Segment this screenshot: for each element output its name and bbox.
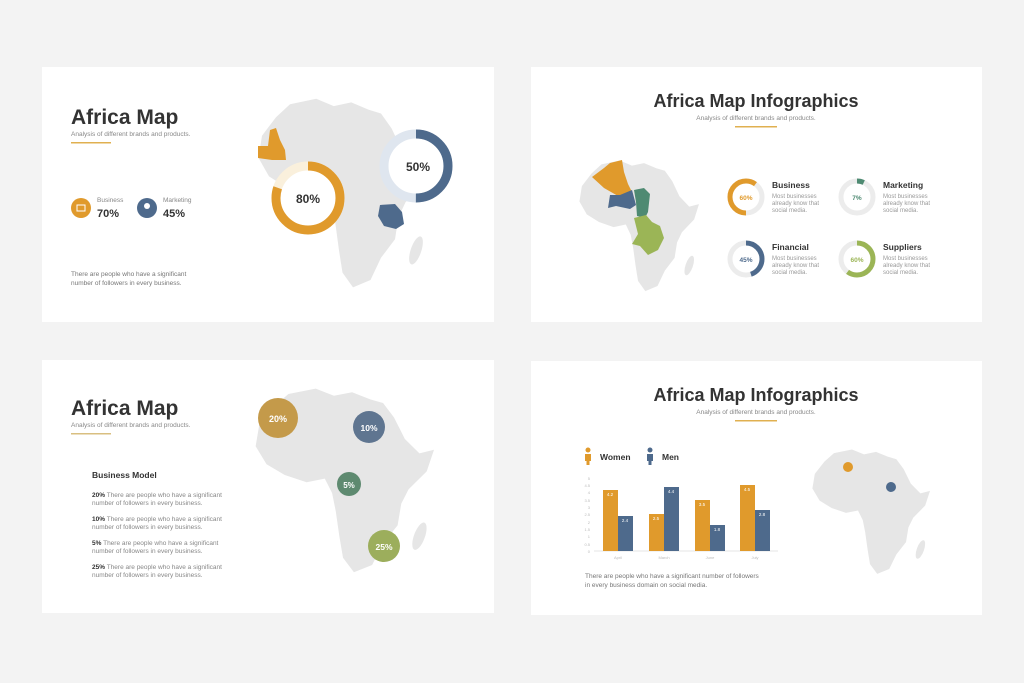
item: financial: social media. (772, 270, 807, 276)
list: number of followers in every business. (92, 524, 203, 531)
donut 80% (276, 166, 340, 230)
donut 80%: 80% (296, 192, 320, 206)
item: financial: Financial (772, 242, 809, 252)
bubble 25% (368, 530, 400, 562)
bar chart: 5 (588, 476, 591, 481)
map: africa bottom-left (256, 389, 434, 572)
bar chart: 4.5 (744, 487, 751, 492)
item: marketing (841, 180, 930, 214)
subtitle: Analysis of different brands and products. (71, 131, 191, 138)
donut 50%: 50% (406, 160, 430, 174)
title: Africa Map (71, 397, 178, 420)
panel: bottom-right chart: in every business domain on social media. (585, 582, 707, 589)
heading: business model: Business Model (92, 470, 157, 480)
bar chart: 4.2 (607, 492, 614, 497)
bar chart: 1.8 (714, 527, 721, 532)
panel: bottom-right chart (531, 361, 982, 615)
bar chart: 0 (588, 549, 591, 554)
list: 20% There are people who have a significant (92, 492, 222, 499)
country: niger (608, 190, 636, 209)
panel: top-right Africa Map Infographics (531, 67, 982, 322)
bubble 20% (258, 398, 298, 438)
country: tanzania (378, 204, 404, 229)
bar chart: 3 (588, 505, 591, 510)
stat: marketing: Marketing (163, 197, 192, 204)
item: marketing: already know that (883, 201, 930, 207)
item: financial (730, 242, 819, 276)
bar chart: 2.5 (653, 516, 660, 521)
item: marketing: Most businesses (883, 194, 928, 200)
item: marketing: Marketing (883, 180, 923, 190)
bubble 5% (337, 472, 361, 496)
item: financial: 45% (739, 257, 753, 264)
stat: marketing (137, 197, 192, 220)
subtitle: Analysis of different brands and products. (696, 115, 816, 122)
country: algeria (592, 160, 632, 196)
stat: marketing: 45% (163, 208, 185, 220)
country: mauritania (258, 128, 286, 160)
country: congo region (632, 215, 664, 255)
bar chart: 4.5 (584, 483, 591, 488)
bubble 10% (353, 411, 385, 443)
footer text: There are people who have a significant number of followers (585, 573, 760, 580)
map: africa bottom-right (812, 449, 930, 574)
item: marketing: social media. (883, 208, 918, 214)
legend (585, 448, 679, 465)
item: marketing: 7% (852, 195, 862, 202)
bar chart: 2.5 (584, 512, 591, 517)
bar chart: 3.5 (699, 502, 706, 507)
list: number of followers in every business. (92, 548, 203, 555)
bar chart (584, 476, 778, 560)
bubble 5%: 5% (343, 481, 355, 490)
item: suppliers: Most businesses (883, 256, 928, 262)
panel: top-left Africa Map: number of followers in every business. (71, 280, 182, 287)
bubble 25%: 25% (375, 542, 393, 552)
bar chart: 1.5 (584, 527, 591, 532)
subtitle: Analysis of different brands and products. (71, 422, 191, 429)
footer text: There are people who have a significant (71, 271, 186, 278)
bar chart: 2.4 (622, 518, 629, 523)
item: suppliers: Suppliers (883, 242, 922, 252)
bar chart: 3.5 (584, 498, 591, 503)
bar chart: 4 (588, 490, 591, 495)
list: number of followers in every business. (92, 572, 203, 579)
item: business: 60% (739, 195, 753, 202)
bar chart: July (751, 555, 759, 560)
title: Africa Map Infographics (653, 385, 859, 405)
marker orange (843, 462, 853, 472)
bubble 10%: 10% (360, 423, 378, 433)
item: suppliers: already know that (883, 263, 930, 269)
stat: business (71, 197, 124, 220)
panel: bottom-left Africa Map business model (42, 360, 494, 613)
item: suppliers: social media. (883, 270, 918, 276)
subtitle: Analysis of different brands and products. (696, 409, 816, 416)
stat: business: 70% (97, 208, 119, 220)
list: 10% There are people who have a significant (92, 516, 222, 523)
item: financial: already know that (772, 263, 819, 269)
item: suppliers (841, 242, 930, 276)
bar chart: 2 (588, 520, 591, 525)
item: financial: Most businesses (772, 256, 817, 262)
panel: top-left Africa Map (42, 67, 494, 322)
stat: business: Business (97, 197, 124, 204)
item: business: Most businesses (772, 194, 817, 200)
bar chart: 2.8 (759, 512, 766, 517)
legend: Women (600, 452, 631, 462)
list: number of followers in every business. (92, 500, 203, 507)
bubble 20%: 20% (269, 414, 287, 424)
bar chart: June (706, 555, 715, 560)
item: suppliers: 60% (850, 257, 864, 264)
bar chart: April (614, 555, 622, 560)
bar chart: March (658, 555, 670, 560)
legend: Men (662, 452, 679, 462)
bar chart: 0.5 (584, 542, 591, 547)
item: business (730, 180, 819, 214)
list (92, 492, 222, 579)
marker blue (886, 482, 896, 492)
item: business: already know that (772, 201, 819, 207)
bar chart: 4.4 (668, 489, 675, 494)
map: africa top-left (258, 99, 430, 287)
donut 50% (384, 134, 448, 198)
list: 25% There are people who have a significant (92, 564, 222, 571)
list: 5% There are people who have a significant (92, 540, 219, 547)
title: Africa Map Infographics (653, 91, 859, 111)
bar chart: 1 (588, 534, 591, 539)
country: chad (634, 188, 650, 218)
item: business: Business (772, 180, 810, 190)
map: africa top-right (579, 161, 699, 291)
item: business: social media. (772, 208, 807, 214)
title: Africa Map (71, 106, 178, 129)
